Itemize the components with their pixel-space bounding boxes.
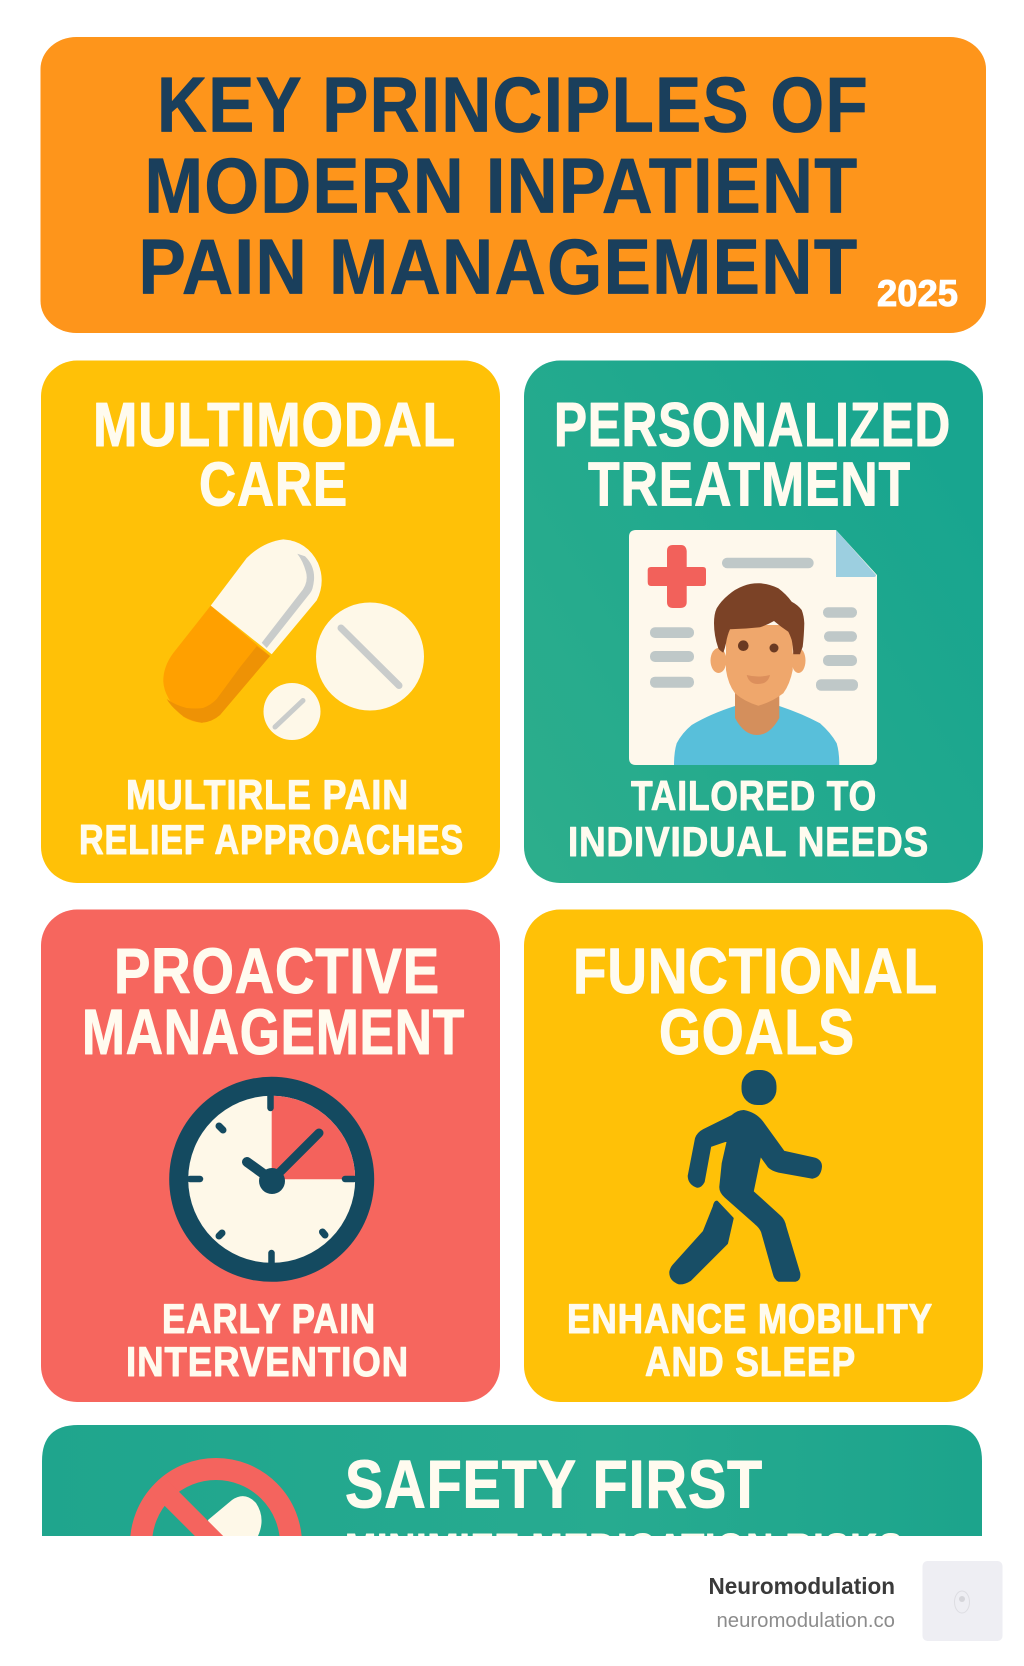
caption line 2: INTERVENTION [126,1338,409,1385]
caption line 1: TAILORED TO [631,772,877,819]
heading: management: MANAGEMENT [82,996,465,1068]
icon: no pill sign [130,1458,302,1536]
heading line 2: CARE [199,450,348,520]
title line 3: PAIN MANAGEMENT [138,222,858,310]
icon: patient record [629,530,877,765]
icon: walking person [670,1071,821,1283]
icon: capsule and tablets [163,539,424,740]
title line 2: MODERN INPATIENT [144,142,858,230]
heading: functional: FUNCTIONAL [573,935,938,1007]
panel: multimodal care [41,360,500,883]
heading: proactive: PROACTIVE [114,935,440,1007]
title banner [40,37,986,333]
panel: personalized treatment [524,360,983,883]
caption line 2: RELIEF APPROACHES [79,816,464,863]
brand logo placeholder [922,1561,1002,1641]
title line 1: KEY PRINCIPLES OF [157,60,869,148]
brand url: neuromodulation.co [716,1610,895,1632]
brand name: Neuromodulation [708,1573,895,1599]
heading: safety first: SAFETY FIRST [345,1446,763,1522]
heading: treatment: TREATMENT [588,450,911,520]
caption line 1: EARLY PAIN [162,1295,376,1342]
caption: minimize medication risks: MINIMIZE MEDICATION RISKS [345,1525,904,1574]
caption line 2: INDIVIDUAL NEEDS [568,818,929,865]
icon: clock [169,1077,374,1282]
heading: goals: GOALS [659,996,855,1068]
caption line 1: MULTIRLE PAIN [126,771,409,818]
caption line 1: ENHANCE MOBILITY [567,1295,933,1342]
caption line 2: AND SLEEP [645,1338,856,1385]
panel: proactive management [41,910,500,1402]
footer brand [708,1561,1002,1641]
panel: functional goals [524,910,983,1402]
heading: multimodal care: MULTIMODAL [93,391,456,460]
panel: safety first [42,1425,982,1536]
year badge: 2025 [877,273,958,314]
